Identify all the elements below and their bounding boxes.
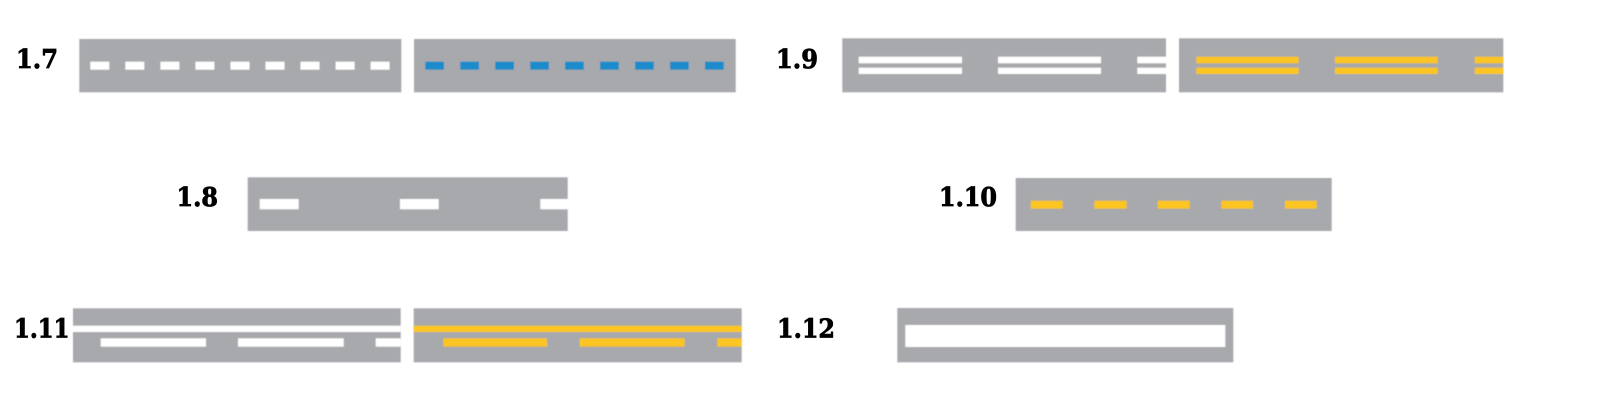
road: 1.10 yellow dashes (1016, 178, 1332, 231)
road: 1.12 white stop bar (897, 308, 1233, 362)
road: 1.7 blue short dashes (414, 39, 736, 92)
road: 1.9 yellow double dashes (1179, 38, 1503, 92)
road: 1.8 white long-gap dashes (248, 177, 568, 231)
label: 1.9: 1.9 (776, 45, 818, 75)
road: 1.11 yellow solid and dashed line (414, 308, 742, 362)
road: 1.9 white double dashes (842, 38, 1167, 92)
label: 1.12: 1.12 (777, 314, 835, 344)
label: 1.11: 1.11 (14, 314, 70, 344)
label: 1.10: 1.10 (939, 183, 997, 213)
label: 1.8: 1.8 (176, 183, 218, 213)
road: 1.11 white solid and dashed line (73, 308, 401, 362)
label: 1.7: 1.7 (16, 45, 58, 75)
road: 1.7 white short dashes (79, 39, 401, 92)
